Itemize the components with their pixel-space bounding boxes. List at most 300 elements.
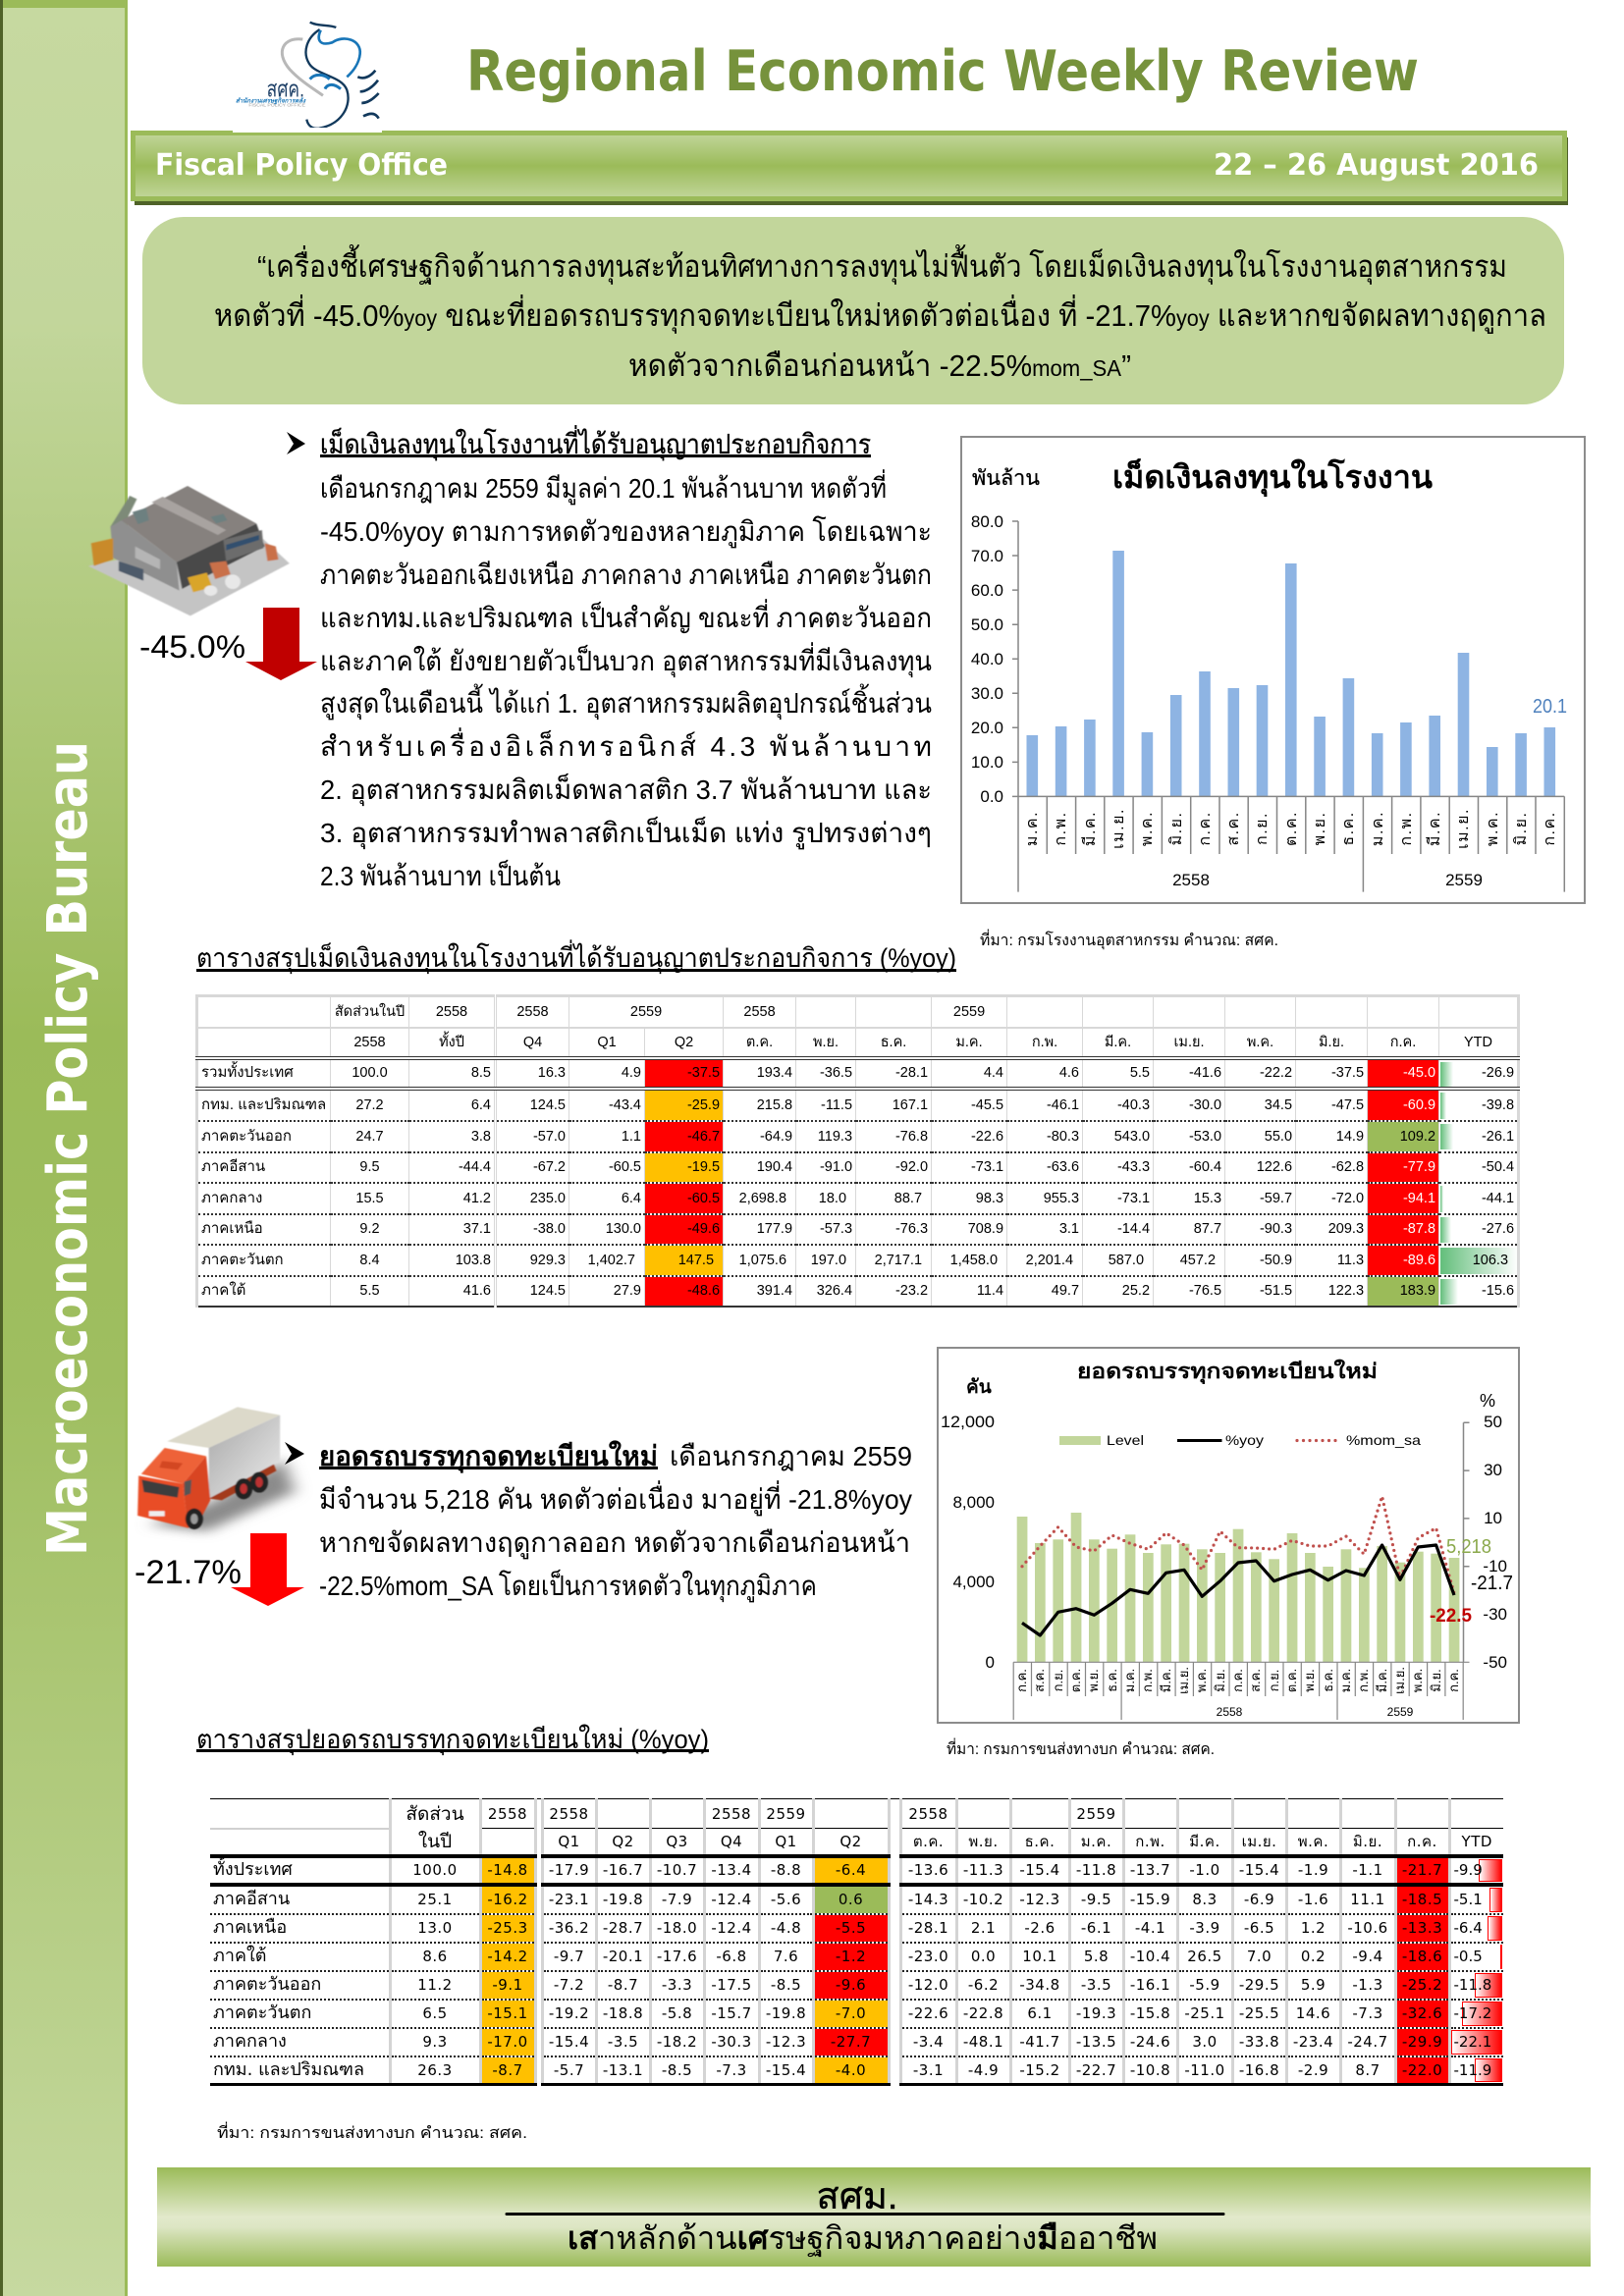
month labels: เม.ย. bbox=[1392, 1667, 1407, 1694]
table: truck registrations by region: -13.3 bbox=[1402, 1919, 1442, 1937]
table: factory investment by region: 190.4 bbox=[757, 1159, 792, 1175]
table: factory investment by region: -27.6 bbox=[1482, 1221, 1514, 1237]
table: factory investment by region: Q2 bbox=[675, 1035, 693, 1050]
table: truck registrations by region: Q2 bbox=[612, 1833, 634, 1850]
table: factory investment by region: ต.ค. bbox=[746, 1035, 773, 1050]
y axis: 30.0 bbox=[971, 684, 1003, 703]
table: factory investment by region: -28.1 bbox=[895, 1065, 928, 1081]
table: factory investment by region: -59.7 bbox=[1260, 1190, 1292, 1205]
body text: 2.3 พันล้านบาท เป็นต้น bbox=[320, 859, 561, 891]
table: truck registrations by region: -10.6 bbox=[1347, 1919, 1388, 1937]
table: factory investment by region: 25.2 bbox=[1122, 1283, 1150, 1299]
table: truck registrations by region: -25.5 bbox=[1239, 2004, 1279, 2022]
table: factory investment by region: -39.8 bbox=[1482, 1097, 1514, 1113]
table: truck registrations by region: -11.3 bbox=[963, 1861, 1003, 1879]
table: truck registrations by region: -15.4 bbox=[766, 2061, 806, 2079]
year labels: 2559 bbox=[1445, 871, 1483, 889]
table: truck registrations by region: -12.3 bbox=[766, 2033, 806, 2051]
table: truck registrations by region: -24.6 bbox=[1130, 2033, 1170, 2051]
table: factory investment by region: 1,075.6 bbox=[739, 1253, 786, 1268]
table: truck registrations by region: 5.9 bbox=[1301, 1976, 1326, 1994]
table: truck registrations by region: -6.1 bbox=[1081, 1919, 1111, 1937]
table: factory investment by region: -73.1 bbox=[1117, 1190, 1150, 1205]
table: truck registrations by region: Q3 bbox=[666, 1833, 688, 1850]
table: truck registrations by region: -18.5 bbox=[1402, 1891, 1442, 1908]
table: truck registrations by region: YTD bbox=[1462, 1833, 1492, 1850]
table: truck registrations by region: -41.7 bbox=[1019, 2033, 1060, 2051]
table: factory investment by region: 2,698.8 bbox=[739, 1190, 786, 1205]
line: %mom_sa bbox=[1022, 1496, 1454, 1593]
table: truck registrations by region: -22.8 bbox=[963, 2004, 1003, 2022]
table: factory investment by region: -44.1 bbox=[1482, 1190, 1514, 1205]
month labels: มิ.ย. bbox=[1213, 1669, 1227, 1692]
table: truck registrations by region: มี.ค. bbox=[1189, 1833, 1220, 1850]
month labels: ธ.ค. bbox=[1321, 1669, 1335, 1692]
table: truck registrations by region: -17.6 bbox=[657, 1948, 697, 1965]
table: factory investment by region: 2559 bbox=[630, 1004, 662, 1020]
table: truck registrations by region: -11.9 bbox=[1453, 2061, 1491, 2079]
month labels: พ.ค. bbox=[1194, 1669, 1209, 1692]
table: factory investment by region: -72.0 bbox=[1331, 1190, 1364, 1205]
table: factory investment by region: -38.0 bbox=[533, 1221, 566, 1237]
table: truck registrations by region: 26.5 bbox=[1187, 1948, 1222, 1965]
band date: 22 – 26 August 2016 bbox=[1214, 148, 1539, 183]
table: factory investment by region: 5.5 bbox=[359, 1283, 380, 1299]
month labels: ต.ค. bbox=[1283, 811, 1300, 846]
table: factory investment by region: -92.0 bbox=[895, 1159, 928, 1175]
table: factory investment by region: -43.3 bbox=[1117, 1159, 1150, 1175]
table: factory investment by region: 11.3 bbox=[1337, 1253, 1364, 1268]
month labels: พ.ค. bbox=[1139, 811, 1156, 846]
table: factory investment by region: 215.8 bbox=[757, 1097, 792, 1113]
table: truck registrations by region: -9.6 bbox=[836, 1976, 866, 1994]
month labels: เม.ย. bbox=[1110, 808, 1127, 849]
table: factory investment by region: 2558 bbox=[353, 1035, 386, 1050]
table: factory investment by region: -19.5 bbox=[687, 1159, 720, 1175]
month labels: ส.ค. bbox=[1225, 811, 1242, 846]
table: factory investment by region: 18.0 bbox=[819, 1190, 846, 1205]
table: truck registrations by region: -4.1 bbox=[1135, 1919, 1165, 1937]
table: factory investment by region: 587.0 bbox=[1109, 1253, 1144, 1268]
table: factory investment by region: 543.0 bbox=[1114, 1129, 1150, 1145]
table: factory investment by region: ภาคอีสาน bbox=[201, 1158, 265, 1175]
table: truck registrations by region: -1.1 bbox=[1352, 1861, 1383, 1879]
x axis bbox=[1013, 1662, 1469, 1720]
y axis: 10.0 bbox=[971, 753, 1003, 772]
y axis bbox=[971, 512, 1018, 806]
table: truck registrations by region: -15.2 bbox=[1019, 2061, 1060, 2079]
body text: และกทม.และปริมณฑล เป็นสำคัญ ขณะที่ ภาคตะวันออก bbox=[320, 599, 932, 633]
table: factory investment by region: -60.9 bbox=[1403, 1097, 1435, 1113]
sidebar title: Macroeconomic Policy Bureau bbox=[36, 741, 100, 1556]
body text: 3. อุตสาหกรรมทำพลาสติกเป็นเม็ด แท่ง รูปทรงต่างๆ bbox=[320, 816, 932, 850]
month labels: ก.ค. bbox=[1230, 1669, 1245, 1692]
table: truck registrations by region: -5.8 bbox=[662, 2004, 692, 2022]
table: truck registrations by region: -13.6 bbox=[908, 1861, 948, 1879]
table: truck registrations by region: -15.4 bbox=[1239, 1861, 1279, 1879]
bars bbox=[1027, 551, 1555, 796]
table: truck registrations by region: 10.1 bbox=[1022, 1948, 1057, 1965]
table: truck registrations by region: -22.6 bbox=[908, 2004, 948, 2022]
table: truck registrations by region: -9.9 bbox=[1453, 1861, 1483, 1879]
table: truck registrations by region: ภาคตะวันตก bbox=[213, 2002, 311, 2023]
table: truck registrations by region: 26.3 bbox=[417, 2061, 453, 2079]
table: truck registrations by region: -19.2 bbox=[549, 2004, 589, 2022]
left unit: คัน bbox=[966, 1377, 992, 1398]
table: factory investment by region: 6.4 bbox=[622, 1190, 641, 1205]
table: factory investment by region: 122.6 bbox=[1257, 1159, 1292, 1175]
table: truck registrations by region: -6.8 bbox=[716, 1948, 747, 1965]
month labels: เม.ย. bbox=[1176, 1667, 1191, 1694]
table: truck registrations by region: Q2 bbox=[839, 1833, 862, 1850]
table: factory investment by region: ม.ค. bbox=[955, 1035, 983, 1050]
table: truck registrations by region: -24.7 bbox=[1347, 2033, 1388, 2051]
table: truck registrations by region: ภาคเหนือ bbox=[213, 1917, 287, 1938]
table: truck registrations by region: -7.9 bbox=[662, 1891, 692, 1908]
table: factory investment by region: -63.6 bbox=[1047, 1159, 1079, 1175]
combo chart: truck registrations bbox=[938, 1348, 1519, 1723]
month labels: ก.ย. bbox=[1254, 812, 1271, 845]
table: truck registrations by region: 2559 bbox=[1076, 1804, 1116, 1822]
table: factory investment by region: 326.4 bbox=[817, 1283, 852, 1299]
table: truck registrations by region: -15.1 bbox=[487, 2004, 528, 2022]
table: truck registrations by region: -11.8 bbox=[1453, 1976, 1491, 1994]
month labels: ก.พ. bbox=[1053, 811, 1069, 846]
table: factory investment by region: 8.4 bbox=[359, 1253, 380, 1268]
table: truck registrations by region: -12.3 bbox=[1019, 1891, 1060, 1908]
table: truck registrations by region: 3.0 bbox=[1192, 2033, 1218, 2051]
month labels: มี.ค. bbox=[1426, 811, 1443, 846]
table: truck registrations by region: -23.0 bbox=[908, 1948, 948, 1965]
table: factory investment by region: -62.8 bbox=[1331, 1159, 1364, 1175]
right axis: -30 bbox=[1483, 1605, 1507, 1624]
table: truck registrations by region: -7.0 bbox=[836, 2004, 866, 2022]
table: factory investment by region: 55.0 bbox=[1265, 1129, 1292, 1145]
month labels: ส.ค. bbox=[1248, 1669, 1263, 1692]
y axis: 50.0 bbox=[971, 615, 1003, 634]
table: truck registrations by region: -23.1 bbox=[549, 1891, 589, 1908]
table: truck registrations by region: -32.6 bbox=[1402, 2004, 1442, 2022]
table: truck registrations by region: -6.9 bbox=[1244, 1891, 1274, 1908]
month labels: เม.ย. bbox=[1455, 808, 1472, 849]
table: factory investment by region: 209.3 bbox=[1328, 1221, 1364, 1237]
table: truck registrations by region: -14.2 bbox=[487, 1948, 528, 1965]
band left text: Fiscal Policy Office bbox=[155, 148, 448, 183]
table: truck registrations by region: -6.4 bbox=[836, 1861, 866, 1879]
table: factory investment by region: 1,402.7 bbox=[588, 1253, 635, 1268]
table: truck registrations by region: 8.7 bbox=[1355, 2061, 1380, 2079]
left axis labels: 12,000 bbox=[941, 1413, 995, 1431]
table: factory investment by region: 929.3 bbox=[530, 1253, 566, 1268]
table: truck registrations by region: ก.พ. bbox=[1135, 1833, 1165, 1850]
table: factory investment by region: 124.5 bbox=[530, 1283, 566, 1299]
table: truck registrations by region: -18.6 bbox=[1402, 1948, 1442, 1965]
legend bbox=[1059, 1432, 1421, 1448]
table: factory investment by region: 2558 bbox=[436, 1004, 467, 1020]
table: truck registrations by region: 6.1 bbox=[1027, 2004, 1053, 2022]
table: truck registrations by region: ก.ค. bbox=[1407, 1833, 1437, 1850]
table: truck registrations by region: -3.5 bbox=[608, 2033, 638, 2051]
y axis: 0.0 bbox=[980, 787, 1003, 806]
table: truck registrations by region: ภาคตะวันออก bbox=[213, 1974, 321, 1995]
table: truck registrations by region: -12.4 bbox=[711, 1891, 752, 1908]
table: truck registrations by region: -1.3 bbox=[1352, 1976, 1383, 1994]
table: truck registrations by region: 2.1 bbox=[971, 1919, 996, 1937]
table: truck registrations by region: -3.3 bbox=[662, 1976, 692, 1994]
table: truck registrations by region: พ.ย. bbox=[968, 1833, 999, 1850]
body text: 2. อุตสาหกรรมผลิตเม็ดพลาสติก 3.7 พันล้านบาท และ bbox=[320, 773, 932, 807]
table: factory investment by region: 24.7 bbox=[355, 1129, 384, 1145]
month labels: มิ.ย. bbox=[1429, 1669, 1443, 1692]
table: truck registrations by region: -5.1 bbox=[1453, 1891, 1483, 1908]
table: truck registrations by region: -17.9 bbox=[549, 1861, 589, 1879]
table: factory investment by region: -45.0 bbox=[1403, 1065, 1435, 1081]
table: truck registrations by region: -19.8 bbox=[603, 1891, 643, 1908]
icon: red down arrow bbox=[231, 1533, 304, 1606]
y axis: 40.0 bbox=[971, 650, 1003, 668]
table: truck registrations by region: 7.0 bbox=[1247, 1948, 1272, 1965]
table: factory investment by region: -43.4 bbox=[609, 1097, 641, 1113]
table: truck registrations by region: -9.1 bbox=[492, 1976, 523, 1994]
table: truck registrations by region: -21.7 bbox=[1402, 1861, 1442, 1879]
logo: สศค. bbox=[267, 76, 304, 101]
table: truck registrations by region: -1.9 bbox=[1298, 1861, 1328, 1879]
table: truck registrations by region: -13.7 bbox=[1130, 1861, 1170, 1879]
table: factory investment by region: -50.9 bbox=[1260, 1253, 1292, 1268]
table: factory investment by region: -67.2 bbox=[533, 1159, 566, 1175]
body text: ภาคตะวันออกเฉียงเหนือ ภาคกลาง ภาคเหนือ ภาคตะวันตก bbox=[320, 560, 932, 590]
table: truck registrations by region: -15.7 bbox=[711, 2004, 752, 2022]
table: factory investment by region: -26.1 bbox=[1482, 1129, 1514, 1145]
table: factory investment by region: 100.0 bbox=[352, 1065, 388, 1081]
table: factory investment by region: -47.5 bbox=[1331, 1097, 1364, 1113]
body text: หากขจัดผลทางฤดูกาลออก หดตัวจากเดือนก่อนหน้า bbox=[319, 1527, 910, 1560]
table: truck registrations by region: -4.8 bbox=[771, 1919, 801, 1937]
table: truck registrations by region: 5.8 bbox=[1084, 1948, 1109, 1965]
table: truck registrations by region: -25.3 bbox=[487, 1919, 528, 1937]
table: factory investment by region: ภาคตะวันตก bbox=[201, 1251, 284, 1268]
month labels: พ.ค. bbox=[1485, 811, 1501, 846]
year labels: 2558 bbox=[1172, 871, 1210, 889]
table: truck registrations by region: -12.0 bbox=[908, 1976, 948, 1994]
month labels: ธ.ค. bbox=[1340, 811, 1357, 846]
sidebar bbox=[0, 0, 128, 2296]
table: factory investment by region: -11.5 bbox=[821, 1097, 852, 1113]
right axis bbox=[1463, 1413, 1507, 1672]
table: truck registrations by region: 1.2 bbox=[1301, 1919, 1326, 1937]
table: factory investment by region: YTD bbox=[1464, 1035, 1492, 1050]
table: factory investment by region: 130.0 bbox=[606, 1221, 641, 1237]
table: truck registrations by region: ธ.ค. bbox=[1025, 1833, 1055, 1850]
table: truck registrations by region: -2.6 bbox=[1024, 1919, 1056, 1937]
table: factory investment by region: -23.2 bbox=[895, 1283, 928, 1299]
table: truck registrations by region: -25.1 bbox=[1184, 2004, 1225, 2022]
table: truck registrations by region: -28.1 bbox=[908, 1919, 948, 1937]
legend: %yoy bbox=[1225, 1432, 1264, 1448]
table: truck registrations by region: 14.6 bbox=[1296, 2004, 1330, 2022]
table: truck registrations by region: -22.1 bbox=[1453, 2033, 1491, 2051]
table: factory investment by region: 37.1 bbox=[463, 1221, 491, 1237]
table: truck registrations by region: -10.7 bbox=[657, 1861, 697, 1879]
month labels: ก.ค. bbox=[1197, 811, 1214, 846]
table: factory investment by region: -53.0 bbox=[1189, 1129, 1221, 1145]
header band bbox=[134, 128, 1568, 205]
table: truck registrations by region: 2558 bbox=[712, 1804, 751, 1822]
section: truck registration text bbox=[285, 1440, 912, 1603]
table heading 1: ตารางสรุปเม็ดเงินลงทุนในโรงงานที่ได้รับอนุญาตประกอบกิจการ (%yoy) bbox=[196, 939, 956, 975]
body text: -45.0%yoy ตามการหดตัวของหลายภูมิภาค โดยเฉพาะ bbox=[320, 515, 932, 549]
table: factory investment by region: -22.2 bbox=[1260, 1065, 1292, 1081]
table: factory investment by region: 109.2 bbox=[1400, 1129, 1435, 1145]
body text: เดือนกรกฎาคม 2559 มีมูลค่า 20.1 พันล้านบาท หดตัวที่ bbox=[320, 469, 887, 506]
icon: truck bbox=[137, 1407, 295, 1531]
table: truck registrations by region: -36.2 bbox=[549, 1919, 589, 1937]
table: factory investment by region: 3.8 bbox=[471, 1129, 491, 1145]
table: truck registrations by region: -19.3 bbox=[1076, 2004, 1116, 2022]
table: factory investment by region: 9.2 bbox=[359, 1221, 380, 1237]
table: factory investment by region: เม.ย. bbox=[1173, 1035, 1205, 1050]
table: factory investment by region: 235.0 bbox=[530, 1190, 566, 1205]
table: factory investment by region: Q4 bbox=[523, 1035, 542, 1050]
table: factory investment by region: ทั้งปี bbox=[439, 1035, 464, 1050]
table: factory investment by region: 122.3 bbox=[1328, 1283, 1364, 1299]
table: factory investment by region: 391.4 bbox=[757, 1283, 792, 1299]
table: truck registrations by region: -19.8 bbox=[766, 2004, 806, 2022]
table: truck registrations by region: -7.3 bbox=[716, 2061, 747, 2079]
table: truck registrations by region: -22.7 bbox=[1076, 2061, 1116, 2079]
table: factory investment by region: 87.7 bbox=[1194, 1221, 1221, 1237]
table: truck registrations by region: 2559 bbox=[766, 1804, 806, 1822]
table: factory investment by region: -76.8 bbox=[895, 1129, 928, 1145]
table: truck registrations by region: ภาคอีสาน bbox=[213, 1889, 290, 1909]
body text: สำหรับเครื่องอิเล็กทรอนิกส์ 4.3 พันล้านบาท bbox=[320, 727, 932, 762]
table: factory investment by region: -30.0 bbox=[1189, 1097, 1221, 1113]
table: factory investment by region: -36.5 bbox=[820, 1065, 852, 1081]
table: factory investment by region: 15.3 bbox=[1194, 1190, 1221, 1205]
table: factory investment by region: -94.1 bbox=[1403, 1190, 1435, 1205]
table: truck registrations by region: -14.3 bbox=[908, 1891, 948, 1908]
table: truck registrations by region: -15.8 bbox=[1130, 2004, 1170, 2022]
table: factory investment by region bbox=[195, 994, 1520, 1308]
table: factory investment by region: 3.1 bbox=[1059, 1221, 1079, 1237]
summary line 1: “เครื่องชี้เศรษฐกิจด้านการลงทุนสะท้อนทิศทางการลงทุนไม่ฟื้นตัว โดยเม็ดเงินลงทุนในโรงงานอุตสาหกรรม bbox=[257, 244, 1507, 286]
table: truck registrations by region: -9.7 bbox=[554, 1948, 584, 1965]
left axis labels bbox=[941, 1413, 995, 1672]
month labels: พ.ค. bbox=[1410, 1669, 1425, 1692]
table: truck registrations by region: 0.0 bbox=[971, 1948, 996, 1965]
footer title: สศม. bbox=[817, 2176, 897, 2217]
table: truck registrations by region: -15.4 bbox=[1019, 1861, 1060, 1879]
table: factory investment by region: สัดส่วนในปี bbox=[335, 1004, 405, 1020]
legend: Level bbox=[1107, 1432, 1144, 1448]
icon: bullet arrow bbox=[287, 432, 305, 454]
month labels: ก.ย. bbox=[1051, 1670, 1065, 1691]
table: truck registrations by region: 0.6 bbox=[839, 1891, 863, 1908]
table: truck registrations by region: -13.4 bbox=[711, 1861, 752, 1879]
month labels bbox=[1014, 1667, 1461, 1694]
table: truck registrations by region: พ.ค. bbox=[1298, 1833, 1328, 1850]
table: factory investment by region: พ.ย. bbox=[813, 1035, 839, 1050]
table: factory investment by region: -77.9 bbox=[1403, 1159, 1435, 1175]
right unit: % bbox=[1480, 1391, 1495, 1411]
table: factory investment by region: -76.3 bbox=[895, 1221, 928, 1237]
table: factory investment by region: -50.4 bbox=[1482, 1159, 1514, 1175]
table: truck registrations by region: มิ.ย. bbox=[1353, 1833, 1382, 1850]
year labels bbox=[1172, 871, 1483, 889]
table: factory investment by region: รวมทั้งประเทศ bbox=[201, 1064, 294, 1081]
table: truck registrations by region: -12.4 bbox=[711, 1919, 752, 1937]
table: truck registrations by region: ภาคใต้ bbox=[213, 1946, 267, 1966]
table: truck registrations by region: -10.2 bbox=[963, 1891, 1003, 1908]
table: factory investment by region: ก.ค. bbox=[1390, 1035, 1416, 1050]
table: factory investment by region: ธ.ค. bbox=[881, 1035, 906, 1050]
table: truck registrations by region: -23.4 bbox=[1293, 2033, 1333, 2051]
table: truck registrations by region: 6.5 bbox=[422, 2004, 448, 2022]
table: truck registrations by region: -25.2 bbox=[1402, 1976, 1442, 1994]
table: factory investment by region: -40.3 bbox=[1117, 1097, 1150, 1113]
right axis: 30 bbox=[1484, 1461, 1502, 1479]
table: truck registrations by region: -3.4 bbox=[913, 2033, 944, 2051]
table: truck registrations by region: -4.0 bbox=[836, 2061, 866, 2079]
left axis labels: 4,000 bbox=[952, 1573, 995, 1591]
table: factory investment by region: 11.4 bbox=[977, 1283, 1003, 1299]
table: truck registrations by region: -3.1 bbox=[913, 2061, 944, 2079]
table: factory investment by region: -60.5 bbox=[687, 1190, 720, 1205]
source note 2: ที่มา: กรมการขนส่งทางบก คำนวณ: สศค. bbox=[947, 1737, 1215, 1758]
section heading: เม็ดเงินลงทุนในโรงงานที่ได้รับอนุญาตประกอบกิจการ bbox=[320, 425, 871, 461]
logo: สำนักงานเศรษฐกิจการคลัง bbox=[236, 96, 306, 105]
table: factory investment by region: 15.5 bbox=[355, 1190, 384, 1205]
table: truck registrations by region: -4.9 bbox=[968, 2061, 999, 2079]
table: truck registrations by region: -10.8 bbox=[1130, 2061, 1170, 2079]
month labels: ม.ค. bbox=[1338, 1669, 1353, 1692]
table: factory investment by region: 88.7 bbox=[894, 1190, 922, 1205]
table: factory investment by region: -26.9 bbox=[1482, 1065, 1514, 1081]
legend: %mom_sa bbox=[1346, 1432, 1421, 1448]
table: factory investment by region: 103.8 bbox=[456, 1253, 491, 1268]
data labels: -21.7 bbox=[1471, 1573, 1513, 1594]
table: factory investment by region: 183.9 bbox=[1400, 1283, 1435, 1299]
table: factory investment by region: -44.4 bbox=[459, 1159, 491, 1175]
table: factory investment by region: 147.5 bbox=[678, 1253, 714, 1268]
table: truck registrations by region: -8.5 bbox=[662, 2061, 692, 2079]
y axis: 70.0 bbox=[971, 547, 1003, 565]
chart title: เม็ดเงินลงทุนในโรงงาน bbox=[1112, 457, 1433, 498]
table: factory investment by region: -14.4 bbox=[1117, 1221, 1150, 1237]
summary line 2: หดตัวที่ -45.0%yoy ขณะที่ยอดรถบรรทุกจดทะเบียนใหม่หดตัวต่อเนื่อง ที่ -21.7%yoy และหากขจัดผลทางฤดูกาล bbox=[214, 294, 1546, 335]
table: factory investment by region: 5.5 bbox=[1130, 1065, 1150, 1081]
table: truck registrations by region bbox=[210, 1798, 1503, 2086]
table: factory investment by region: -49.6 bbox=[687, 1221, 720, 1237]
table: truck registrations by region: ภาคกลาง bbox=[213, 2031, 287, 2052]
month labels: ก.ค. bbox=[1014, 1669, 1029, 1692]
table: truck registrations by region: Q1 bbox=[775, 1833, 797, 1850]
table: truck registrations by region: -8.7 bbox=[492, 2061, 523, 2079]
table: factory investment by region: 2558 bbox=[743, 1004, 776, 1020]
month labels: พ.ย. bbox=[1312, 812, 1328, 845]
table: factory investment by region: มิ.ย. bbox=[1319, 1035, 1344, 1050]
table: truck registrations by region: -13.1 bbox=[603, 2061, 643, 2079]
callout: -21.7%: -21.7% bbox=[135, 1554, 242, 1591]
chart unit: พันล้าน bbox=[972, 467, 1040, 490]
table: truck registrations by region: -3.9 bbox=[1189, 1919, 1220, 1937]
table: factory investment by region: 119.3 bbox=[818, 1129, 852, 1145]
table: truck registrations by region: -29.9 bbox=[1402, 2033, 1442, 2051]
table: factory investment by region: 106.3 bbox=[1473, 1253, 1508, 1268]
month labels: ต.ค. bbox=[1284, 1669, 1299, 1692]
table: truck registrations by region: -18.0 bbox=[657, 1919, 697, 1937]
table: truck registrations by region: -6.2 bbox=[968, 1976, 999, 1994]
